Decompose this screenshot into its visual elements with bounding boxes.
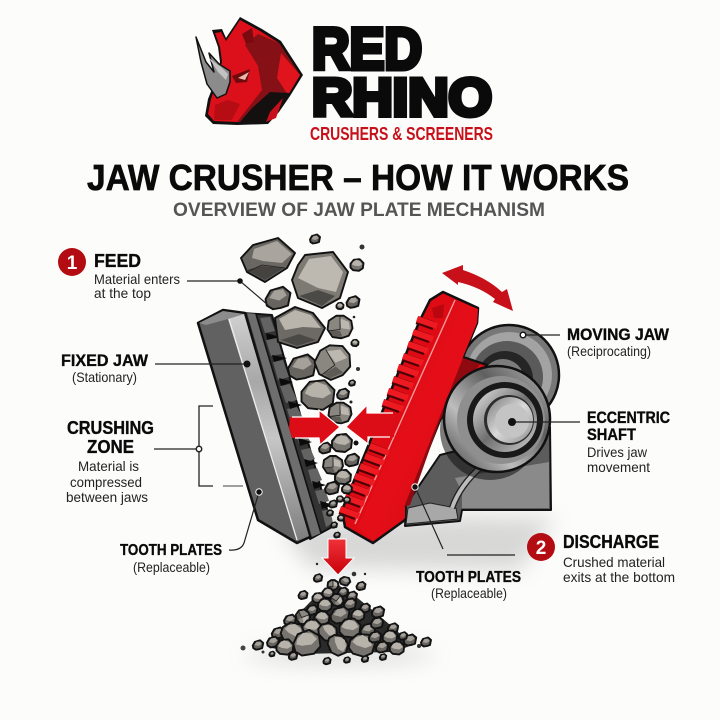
label: discharge [527, 532, 675, 585]
label: fixed jaw: FIXED JAW [61, 351, 149, 370]
label: feed: FEED [94, 251, 141, 271]
logo wordmark RHINO: RHINO [312, 68, 492, 128]
bracket: crushing zone [154, 406, 243, 486]
label: tooth plates left [120, 542, 222, 575]
label: crushing zone: Material is [78, 458, 139, 474]
label: tooth plates right: TOOTH PLATES [416, 569, 521, 586]
flywheel: eccentric shaft [440, 366, 550, 480]
diagram: jaw crusher [198, 234, 559, 664]
badge 1: 1 [67, 253, 78, 274]
label: moving jaw: (Reciprocating) [567, 343, 651, 359]
icon: rhino head [196, 17, 303, 125]
label: eccentric shaft: Drives jaw [587, 444, 648, 460]
subtitle: OVERVIEW OF JAW PLATE MECHANISM [173, 200, 545, 221]
base frame [405, 427, 551, 526]
large rock 2 [292, 252, 348, 308]
label: crushing zone: between jaws [66, 489, 148, 505]
label: fixed jaw [61, 351, 149, 385]
rock pile [240, 563, 431, 664]
label: eccentric shaft: movement [587, 459, 650, 475]
title: JAW CRUSHER – HOW IT WORKS [87, 157, 629, 198]
badge 2: 2 [536, 538, 546, 559]
large rock 1 [241, 238, 295, 282]
arrow: jaw motion [442, 265, 513, 311]
label: eccentric shaft [587, 408, 670, 475]
label: moving jaw [567, 325, 670, 359]
label: crushing zone: ZONE [87, 437, 134, 457]
leader: feed [187, 278, 268, 305]
label: feed: Material enters [94, 271, 180, 287]
leader: tooth plates right [412, 484, 515, 555]
label: crushing zone: CRUSHING [67, 418, 154, 438]
fixed jaw [198, 310, 334, 543]
rocks: crushed material [319, 434, 359, 538]
label: eccentric shaft: ECCENTRIC [587, 408, 670, 427]
moving jaw [340, 292, 487, 543]
label: discharge: DISCHARGE [563, 532, 659, 552]
jaw ribs [340, 320, 434, 516]
badge 2 [527, 533, 555, 561]
label: tooth plates right [416, 569, 521, 601]
logo tagline: CRUSHERS & SCREENERS [310, 124, 493, 144]
leader: moving jaw [520, 332, 560, 338]
label: feed [58, 248, 180, 301]
label: tooth plates left: (Replaceable) [133, 559, 210, 575]
leader: fixed jaw [155, 360, 250, 368]
label: discharge: exits at the bottom [563, 569, 675, 585]
label: feed: at the top [94, 285, 151, 301]
arrow: right compression [346, 405, 396, 444]
leader: eccentric shaft [508, 418, 580, 426]
tooth plate [243, 313, 332, 539]
label: crushing zone: compressed [70, 474, 142, 490]
rocks: feed [241, 234, 364, 446]
plate body [198, 310, 310, 543]
icon: horn [196, 37, 230, 98]
label: tooth plates right: (Replaceable) [431, 585, 507, 601]
soft shadows [245, 515, 555, 663]
label: fixed jaw: (Stationary) [72, 369, 137, 385]
label: crushing zone [66, 418, 154, 505]
label: tooth plates left: TOOTH PLATES [120, 542, 222, 559]
arrow: discharge [322, 539, 354, 575]
logo wordmark RED: RED [312, 17, 422, 82]
large rock 3 [275, 307, 325, 348]
label: eccentric shaft: SHAFT [587, 425, 637, 444]
arrow: left compression [289, 410, 340, 445]
logo: Red Rhino [196, 17, 493, 144]
leader: tooth plates left [229, 489, 262, 550]
label: moving jaw: MOVING JAW [567, 325, 670, 344]
label: discharge: Crushed material [563, 554, 665, 570]
rear wheel [459, 325, 559, 425]
